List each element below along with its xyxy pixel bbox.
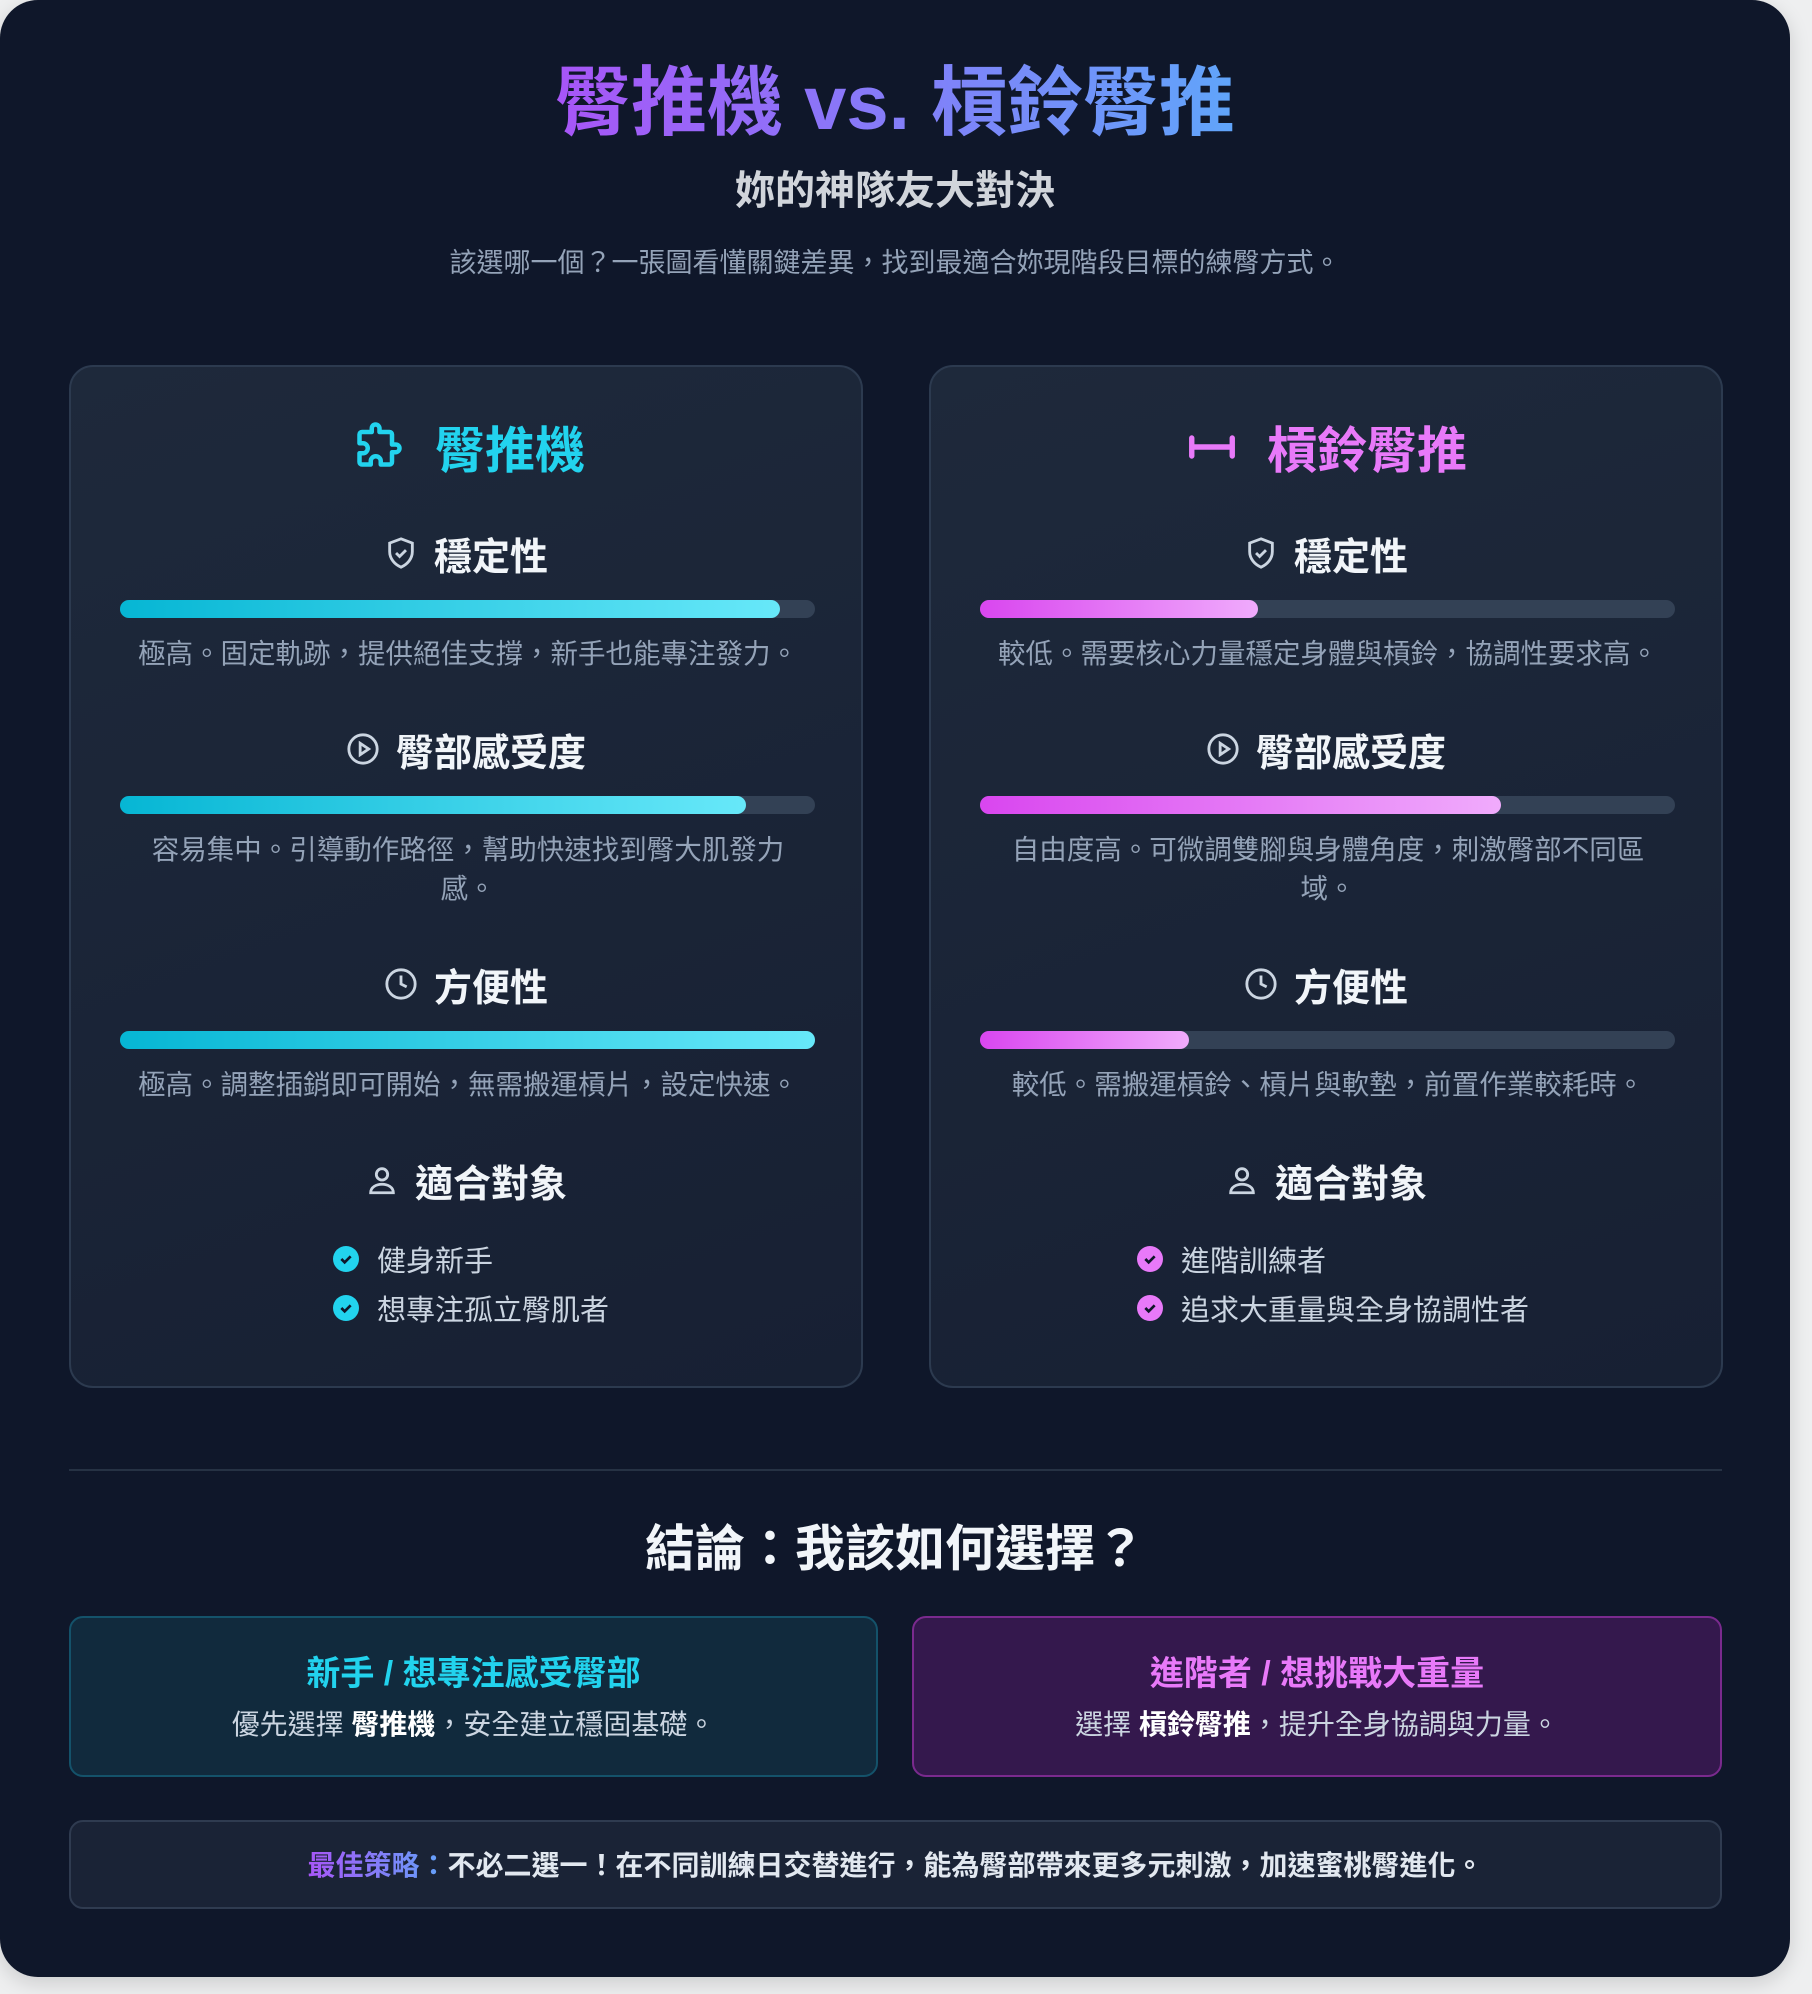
callout: advanced: 選擇 槓鈴臀推，提升全身協調與力量。: [1075, 1709, 1559, 1740]
strategy box: [69, 1820, 1722, 1909]
panel: barbell hip thrust: 較低。需搬運槓鈴、槓片與軟墊，前置作業較耗時。: [1012, 1069, 1644, 1100]
callout: advanced: [912, 1616, 1722, 1777]
panel: barbell hip thrust: 自由度高。可微調雙腳與身體角度，刺激臀部不同區: [1012, 834, 1644, 865]
panel title: [357, 422, 585, 479]
panel title: 槓鈴臀推: [1267, 423, 1467, 479]
list: 進階訓練者: [1181, 1246, 1326, 1278]
stability: 穩定性: [434, 536, 548, 578]
list: [1137, 1246, 1529, 1327]
convenience: 方便性: [1294, 968, 1408, 1010]
strategy box: 最佳策略：不必二選一！在不同訓練日交替進行，能為臀部帶來更多元刺激，加速蜜桃臀進化。: [307, 1850, 1484, 1881]
callout: advanced: 進階者 / 想挑戰大重量: [1150, 1655, 1484, 1693]
suitable: 適合對象: [415, 1164, 567, 1206]
conclusion heading: 結論：我該如何選擇？: [645, 1521, 1145, 1577]
glute feel: 臀部感受度: [1256, 732, 1446, 774]
panel: barbell hip thrust: 較低。需要核心力量穩定身體與槓鈴，協調性要求高。: [998, 638, 1658, 669]
convenience: [1245, 968, 1408, 1010]
callout: beginner: [69, 1616, 878, 1777]
panel: hip thrust machine: [69, 365, 863, 1388]
panel: barbell hip thrust: [929, 365, 1723, 1388]
description: 該選哪一個？一張圖看懂關鍵差異，找到最適合妳現階段目標的練臀方式。: [450, 248, 1340, 278]
glute feel: 臀部感受度: [396, 732, 586, 774]
list: 追求大重量與全身協調性者: [1181, 1295, 1529, 1327]
callout: beginner: 新手 / 想專注感受臀部: [306, 1655, 641, 1693]
stability: 穩定性: [1294, 536, 1408, 578]
panel: hip thrust machine: 極高。固定軌跡，提供絕佳支撐，新手也能專注發力。: [138, 638, 798, 669]
subtitle: 妳的神隊友大對決: [735, 169, 1055, 213]
title: 臀推機 vs. 槓鈴臀推: [555, 61, 1235, 146]
convenience: 方便性: [434, 968, 548, 1010]
panel title: 臀推機: [435, 423, 585, 479]
suitable: 適合對象: [1275, 1164, 1427, 1206]
panel: hip thrust machine: 容易集中。引導動作路徑，幫助快速找到臀大肌發力: [152, 834, 784, 865]
panel: barbell hip thrust: 域。: [1300, 873, 1356, 904]
list: [333, 1246, 609, 1327]
convenience: [385, 968, 548, 1010]
list: 想專注孤立臀肌者: [377, 1295, 609, 1327]
list: 健身新手: [377, 1246, 493, 1278]
callout: beginner: 優先選擇 臀推機，安全建立穩固基礎。: [232, 1709, 715, 1740]
panel: hip thrust machine: 極高。調整插銷即可開始，無需搬運槓片，設定快速。: [138, 1069, 798, 1100]
panel: hip thrust machine: 感。: [440, 873, 496, 904]
